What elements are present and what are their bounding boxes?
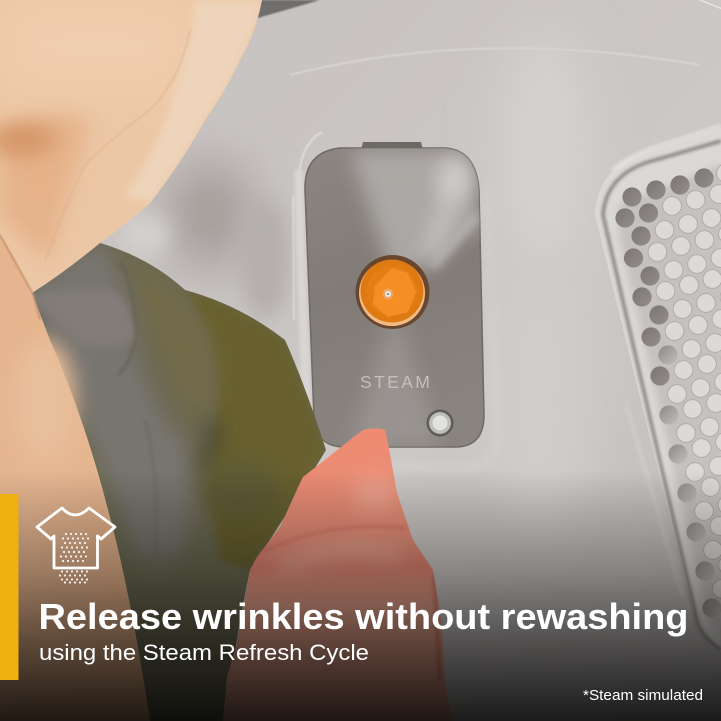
steam plume [350, 150, 482, 447]
bottom dark gradient overlay [0, 470, 721, 721]
STEAM label: STEAM [360, 372, 432, 392]
clothing: crumpled green fabric [20, 240, 326, 721]
title: Release wrinkles without rewashing [38, 596, 688, 637]
icon: t-shirt with steam dots [37, 508, 115, 582]
lower arm [0, 235, 150, 721]
subtitle: using the Steam Refresh Cycle [39, 640, 369, 665]
orange steam nozzle [356, 255, 430, 329]
steam cover panel [305, 142, 484, 447]
upper hand [0, 0, 262, 293]
cover tab [361, 142, 423, 150]
screw [426, 410, 454, 436]
yellow accent bar [0, 494, 18, 680]
footnote: *Steam simulated [583, 688, 703, 704]
finger pressing panel [223, 428, 452, 721]
light holes [648, 164, 721, 598]
mid-tone holes along edge [658, 345, 721, 618]
perforated drum panel [595, 126, 721, 652]
dark holes [615, 168, 714, 386]
recessed surround of steam cover [293, 132, 497, 468]
